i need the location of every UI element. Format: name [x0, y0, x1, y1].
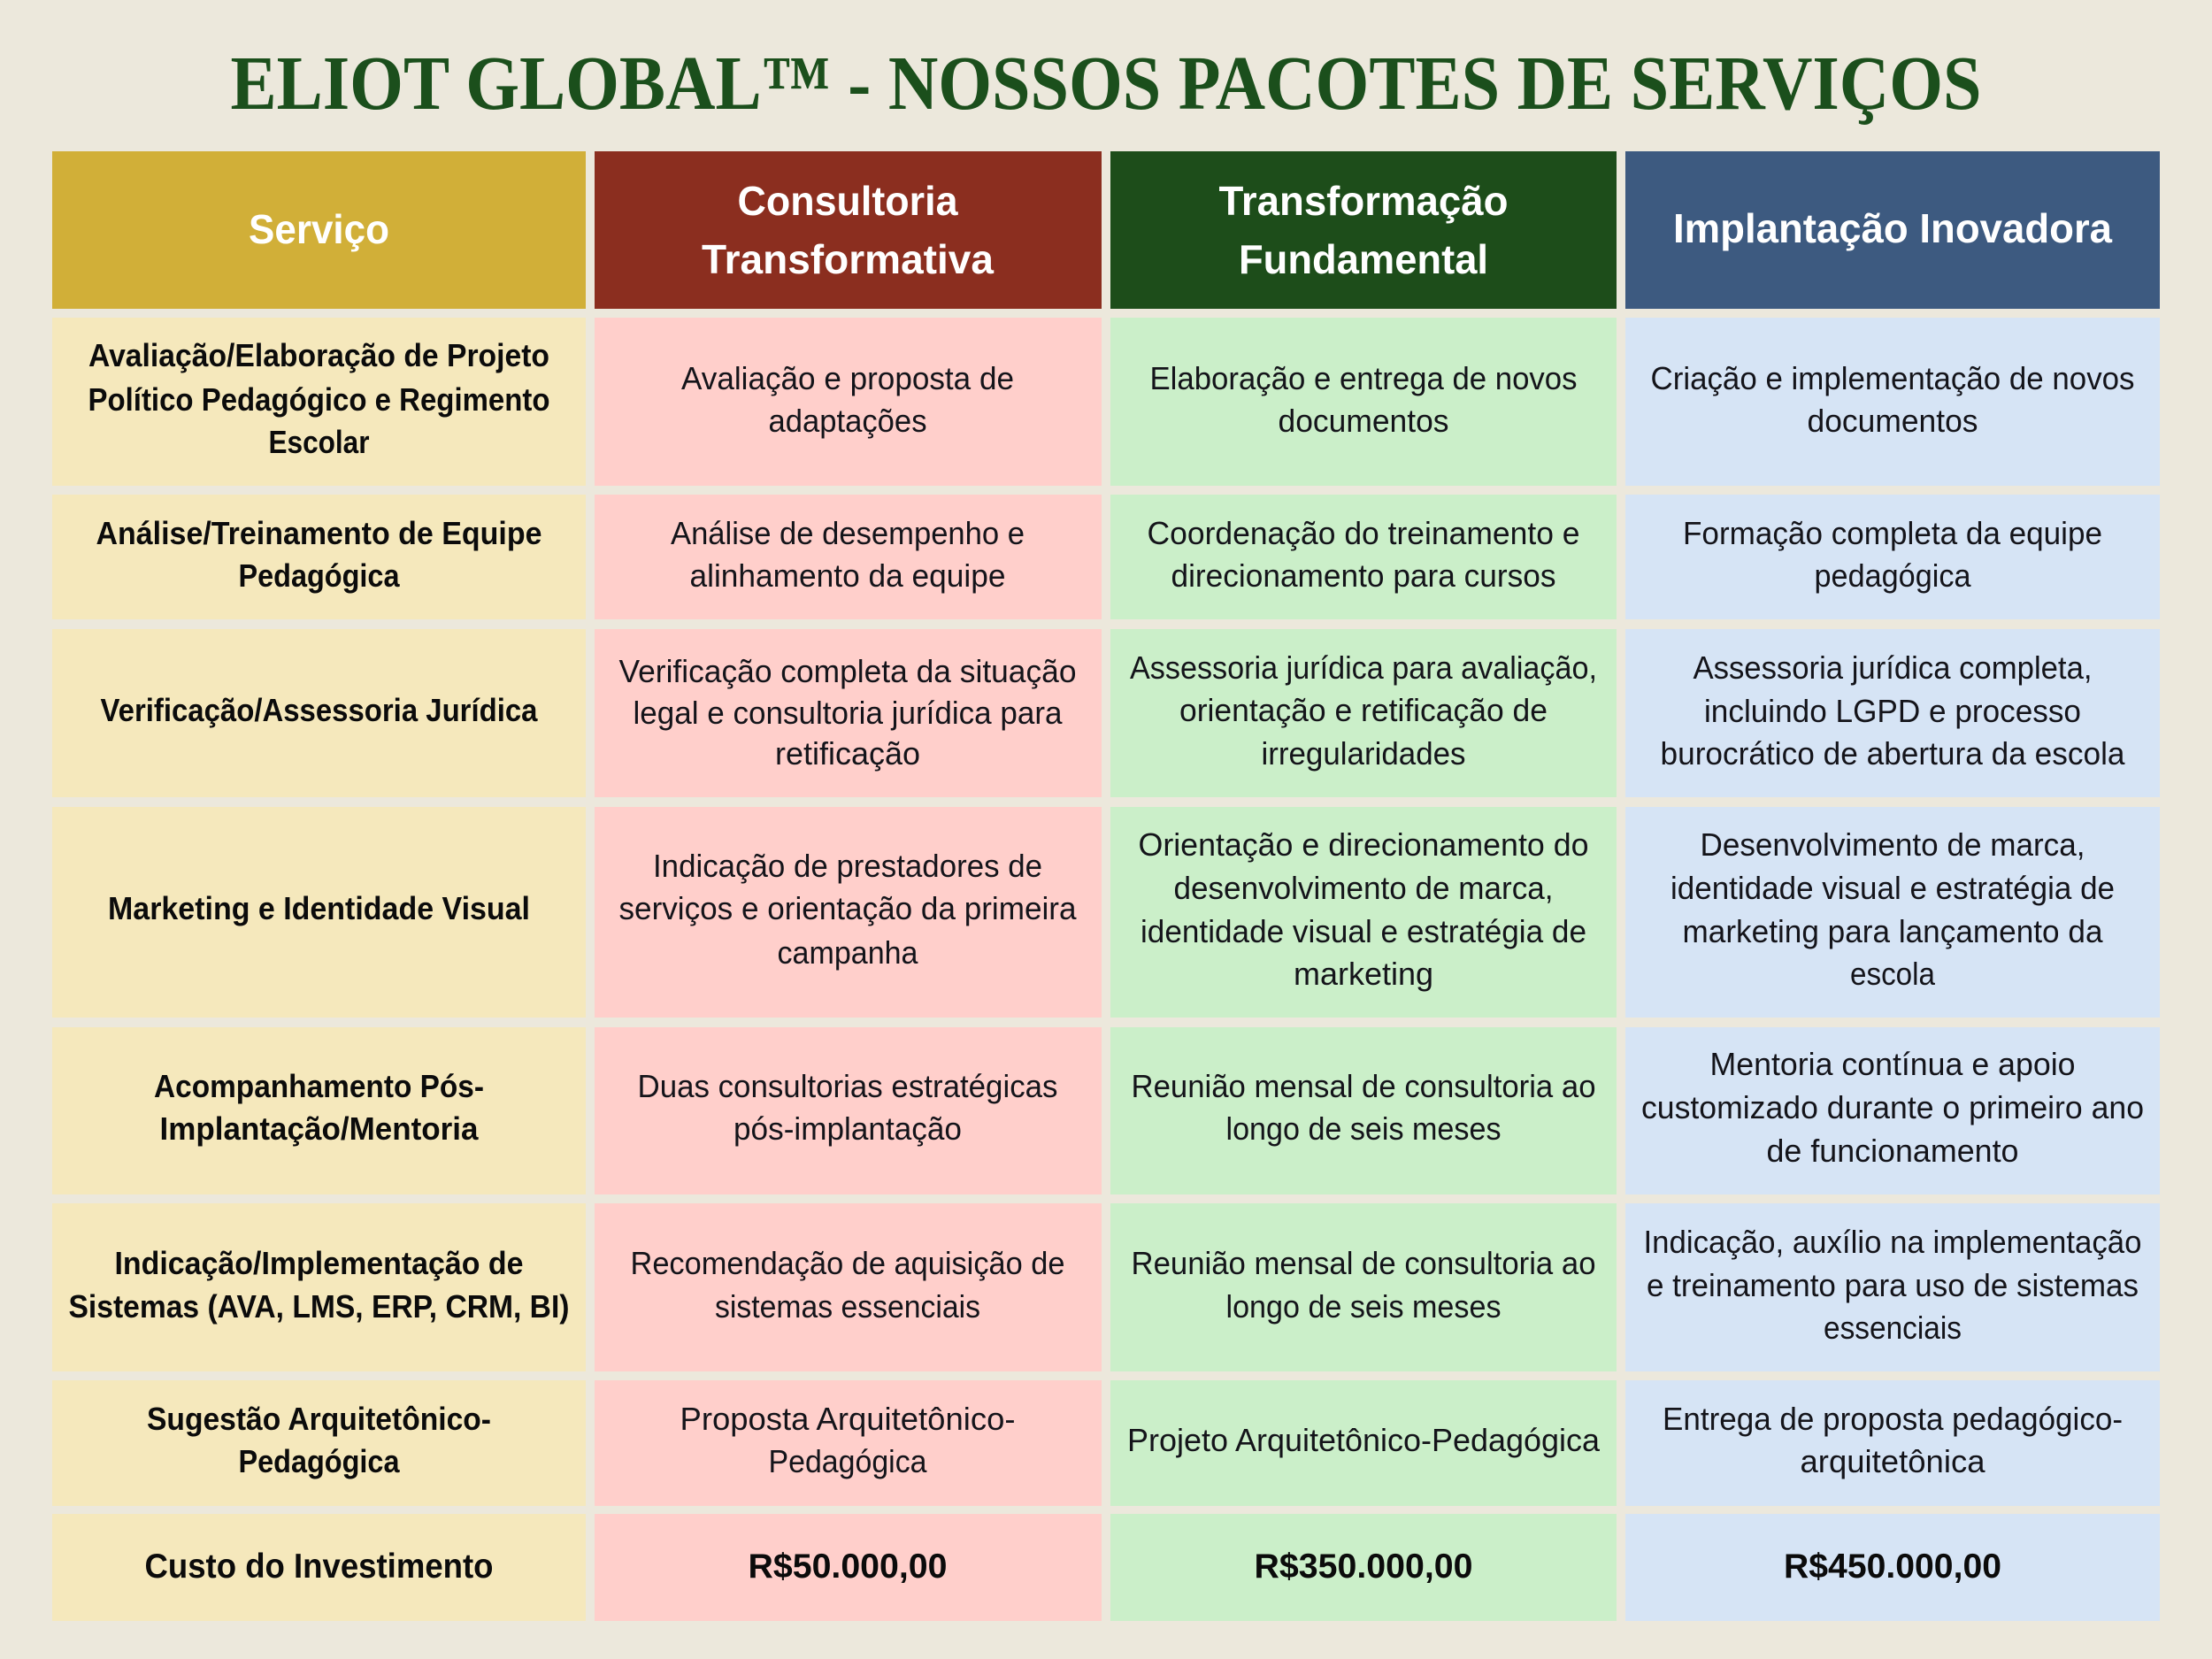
header: Serviço — [52, 151, 586, 309]
cell: Consultoria Transformativa: Pedagógica — [768, 1443, 927, 1479]
cell: service name — [52, 318, 586, 486]
title: ELIOT GLOBAL™ - NOSSOS PACOTES DE SERVIÇOS — [230, 40, 1982, 126]
cell: Consultoria Transformativa — [595, 318, 1102, 486]
cell: Implantação Inovadora: Assessoria jurídica completa, — [1694, 649, 2092, 686]
cell: Transformação Fundamental: Reunião mensal de consultoria ao — [1131, 1068, 1596, 1104]
cell: price R$450.000,00: R$450.000,00 — [1784, 1548, 2001, 1586]
cell: price R$450.000,00 — [1625, 1514, 2160, 1621]
cell: service name — [52, 1203, 586, 1371]
header: Consultoria Transformativa: Transformativa — [702, 236, 994, 282]
cell: Transformação Fundamental: Reunião mensal de consultoria ao — [1131, 1245, 1596, 1281]
row: Acompanhamento — [52, 1027, 2160, 1194]
cell: Implantação Inovadora: Criação e implementação de novos — [1651, 360, 2134, 396]
cell: Transformação Fundamental — [1110, 629, 1617, 797]
cell: service name: Verificação/Assessoria Jurídica — [101, 692, 538, 728]
header: Consultoria Transformativa — [595, 151, 1102, 309]
cell: Implantação Inovadora — [1625, 1027, 2160, 1194]
cell: service name: Marketing e Identidade Visual — [108, 890, 530, 926]
cell: service name: Indicação/Implementação de — [115, 1245, 524, 1281]
cell: service name — [52, 629, 586, 797]
cell: Consultoria Transformativa: alinhamento da equipe — [690, 557, 1005, 594]
cell: service name — [52, 1027, 586, 1194]
cell: Transformação Fundamental: Elaboração e entrega de novos — [1150, 360, 1577, 396]
cell: Implantação Inovadora — [1625, 1203, 2160, 1371]
cell: Transformação Fundamental — [1110, 807, 1617, 1018]
cell: Implantação Inovadora: identidade visual e estratégia de — [1671, 870, 2115, 906]
cell: Transformação Fundamental: Coordenação do treinamento e — [1147, 515, 1580, 551]
cell: service name — [52, 495, 586, 619]
cell: service name: Escolar — [269, 424, 370, 460]
header: Transformação Fundamental: Fundamental — [1239, 236, 1488, 282]
cell: Implantação Inovadora: essenciais — [1824, 1310, 1962, 1346]
cell: service name: Sistemas (AVA, LMS, ERP, CRM, BI) — [69, 1288, 570, 1325]
header: Transformação Fundamental: Transformação — [1219, 178, 1508, 224]
cell: Transformação Fundamental: documentos — [1278, 403, 1449, 439]
cell: Implantação Inovadora: marketing para lançamento da — [1683, 913, 2103, 949]
cell: Consultoria Transformativa: Verificação completa da situação — [619, 653, 1076, 689]
cell: service name — [52, 1380, 586, 1506]
cell: Consultoria Transformativa: Avaliação e proposta de — [681, 360, 1014, 396]
cell: Transformação Fundamental: Projeto Arquitetônico-Pedagógica — [1127, 1422, 1601, 1458]
cell: Consultoria Transformativa — [595, 495, 1102, 619]
cell: service name: Pedagógica — [239, 1443, 400, 1479]
header: Implantação Inovadora: Implantação Inovadora — [1673, 205, 2112, 251]
cell: Implantação Inovadora — [1625, 1380, 2160, 1506]
cell: Implantação Inovadora: de funcionamento — [1766, 1133, 2019, 1169]
row: Arquitetônico-Pedagógica — [52, 1380, 2160, 1506]
cell: service name: Político Pedagógico e Regimento — [88, 381, 550, 418]
cell: Implantação Inovadora: incluindo LGPD e processo — [1704, 693, 2081, 729]
cell: service name: Pedagógica — [239, 557, 400, 594]
cell: Transformação Fundamental: desenvolvimento de marca, — [1173, 870, 1554, 906]
cell: Consultoria Transformativa: retificação — [775, 735, 920, 772]
cell: Implantação Inovadora: burocrático de abertura da escola — [1660, 735, 2125, 772]
row: Assessoria Jurídica — [52, 629, 2160, 797]
cell: service name: Implantação/Mentoria — [159, 1110, 479, 1147]
cell: Transformação Fundamental: direcionamento para cursos — [1171, 557, 1555, 594]
cell: Consultoria Transformativa — [595, 1027, 1102, 1194]
cell: Transformação Fundamental — [1110, 1380, 1617, 1506]
cell: Consultoria Transformativa: Recomendação de aquisição de — [630, 1245, 1065, 1281]
header row — [52, 151, 2160, 309]
cell: service name: Sugestão Arquitetônico- — [147, 1401, 491, 1437]
cell: service name: Análise/Treinamento de Equipe — [96, 515, 541, 551]
cell: Transformação Fundamental: Orientação e direcionamento do — [1138, 826, 1589, 863]
cell: Implantação Inovadora: arquitetônica — [1800, 1443, 1985, 1479]
cell: Implantação Inovadora: escola — [1850, 956, 1936, 992]
cell: Consultoria Transformativa — [595, 807, 1102, 1018]
cell: Implantação Inovadora — [1625, 629, 2160, 797]
cell: Transformação Fundamental: longo de seis meses — [1226, 1288, 1501, 1325]
cell: Implantação Inovadora: Entrega de proposta pedagógico- — [1663, 1401, 2123, 1437]
cell: Transformação Fundamental — [1110, 495, 1617, 619]
cell: service name — [52, 1514, 586, 1621]
cell: Implantação Inovadora — [1625, 318, 2160, 486]
row: Custo do Investimento — [52, 1514, 2160, 1621]
cell: Implantação Inovadora: Mentoria contínua e apoio — [1709, 1046, 2076, 1082]
header: Transformação Fundamental — [1110, 151, 1617, 309]
cell: Consultoria Transformativa: pós-implantação — [733, 1110, 962, 1147]
cell: Consultoria Transformativa — [595, 629, 1102, 797]
cell: price R$350.000,00 — [1110, 1514, 1617, 1621]
cell: Implantação Inovadora: Formação completa da equipe — [1683, 515, 2102, 551]
cell: Transformação Fundamental — [1110, 1203, 1617, 1371]
cell: Transformação Fundamental: irregularidades — [1262, 735, 1465, 772]
cell: Transformação Fundamental: orientação e retificação de — [1179, 692, 1548, 728]
cell: Implantação Inovadora: customizado durante o primeiro ano — [1641, 1089, 2144, 1125]
cell: Implantação Inovadora: pedagógica — [1814, 557, 1971, 594]
cell: Implantação Inovadora — [1625, 807, 2160, 1018]
cell: Consultoria Transformativa: Análise de desempenho e — [671, 515, 1025, 551]
header: Serviço: Serviço — [249, 206, 389, 252]
cell: Consultoria Transformativa: Duas consultorias estratégicas — [637, 1068, 1058, 1104]
cell: Transformação Fundamental: longo de seis meses — [1226, 1110, 1501, 1147]
cell: Consultoria Transformativa: serviços e orientação da primeira — [619, 890, 1077, 926]
row: Equipe Pedagógica — [52, 495, 2160, 619]
header: Implantação Inovadora — [1625, 151, 2160, 309]
cell: Consultoria Transformativa: Indicação de prestadores de — [653, 848, 1042, 884]
cell: Consultoria Transformativa — [595, 1203, 1102, 1371]
cell: price R$50.000,00: R$50.000,00 — [749, 1548, 947, 1586]
cell: service name: Avaliação/Elaboração de Projeto — [88, 337, 549, 373]
cell: Implantação Inovadora: Desenvolvimento de marca, — [1701, 826, 2085, 863]
cell: Transformação Fundamental: marketing — [1294, 956, 1433, 992]
row: Marketing — [52, 807, 2160, 1018]
cell: Transformação Fundamental: identidade visual e estratégia de — [1141, 913, 1586, 949]
cell: Implantação Inovadora: documentos — [1807, 403, 1978, 439]
cell: price R$350.000,00: R$350.000,00 — [1255, 1548, 1472, 1586]
header: Consultoria Transformativa: Consultoria — [738, 178, 958, 224]
cell: Consultoria Transformativa: legal e consultoria jurídica para — [634, 695, 1063, 731]
cell: Implantação Inovadora: Indicação, auxílio na implementação — [1644, 1224, 2141, 1260]
row: Sistemas — [52, 1203, 2160, 1371]
cell: Transformação Fundamental: Assessoria jurídica para avaliação, — [1130, 649, 1597, 686]
cell: Consultoria Transformativa: sistemas essenciais — [715, 1288, 980, 1325]
cell: Implantação Inovadora: e treinamento para uso de sistemas — [1647, 1267, 2139, 1303]
cell: Transformação Fundamental — [1110, 318, 1617, 486]
cell: Transformação Fundamental — [1110, 1027, 1617, 1194]
cell: Consultoria Transformativa: adaptações — [768, 403, 927, 439]
cell: Consultoria Transformativa: campanha — [777, 934, 918, 971]
cell: Consultoria Transformativa — [595, 1380, 1102, 1506]
row: Projeto Político Pedagógico — [52, 318, 2160, 486]
cell: Consultoria Transformativa: Proposta Arquitetônico- — [680, 1401, 1016, 1437]
cell: service name — [52, 807, 586, 1018]
cell: service name: Acompanhamento Pós- — [154, 1068, 484, 1104]
cell: Implantação Inovadora — [1625, 495, 2160, 619]
cell: price R$50.000,00 — [595, 1514, 1102, 1621]
cell: service name: Custo do Investimento — [145, 1548, 494, 1586]
